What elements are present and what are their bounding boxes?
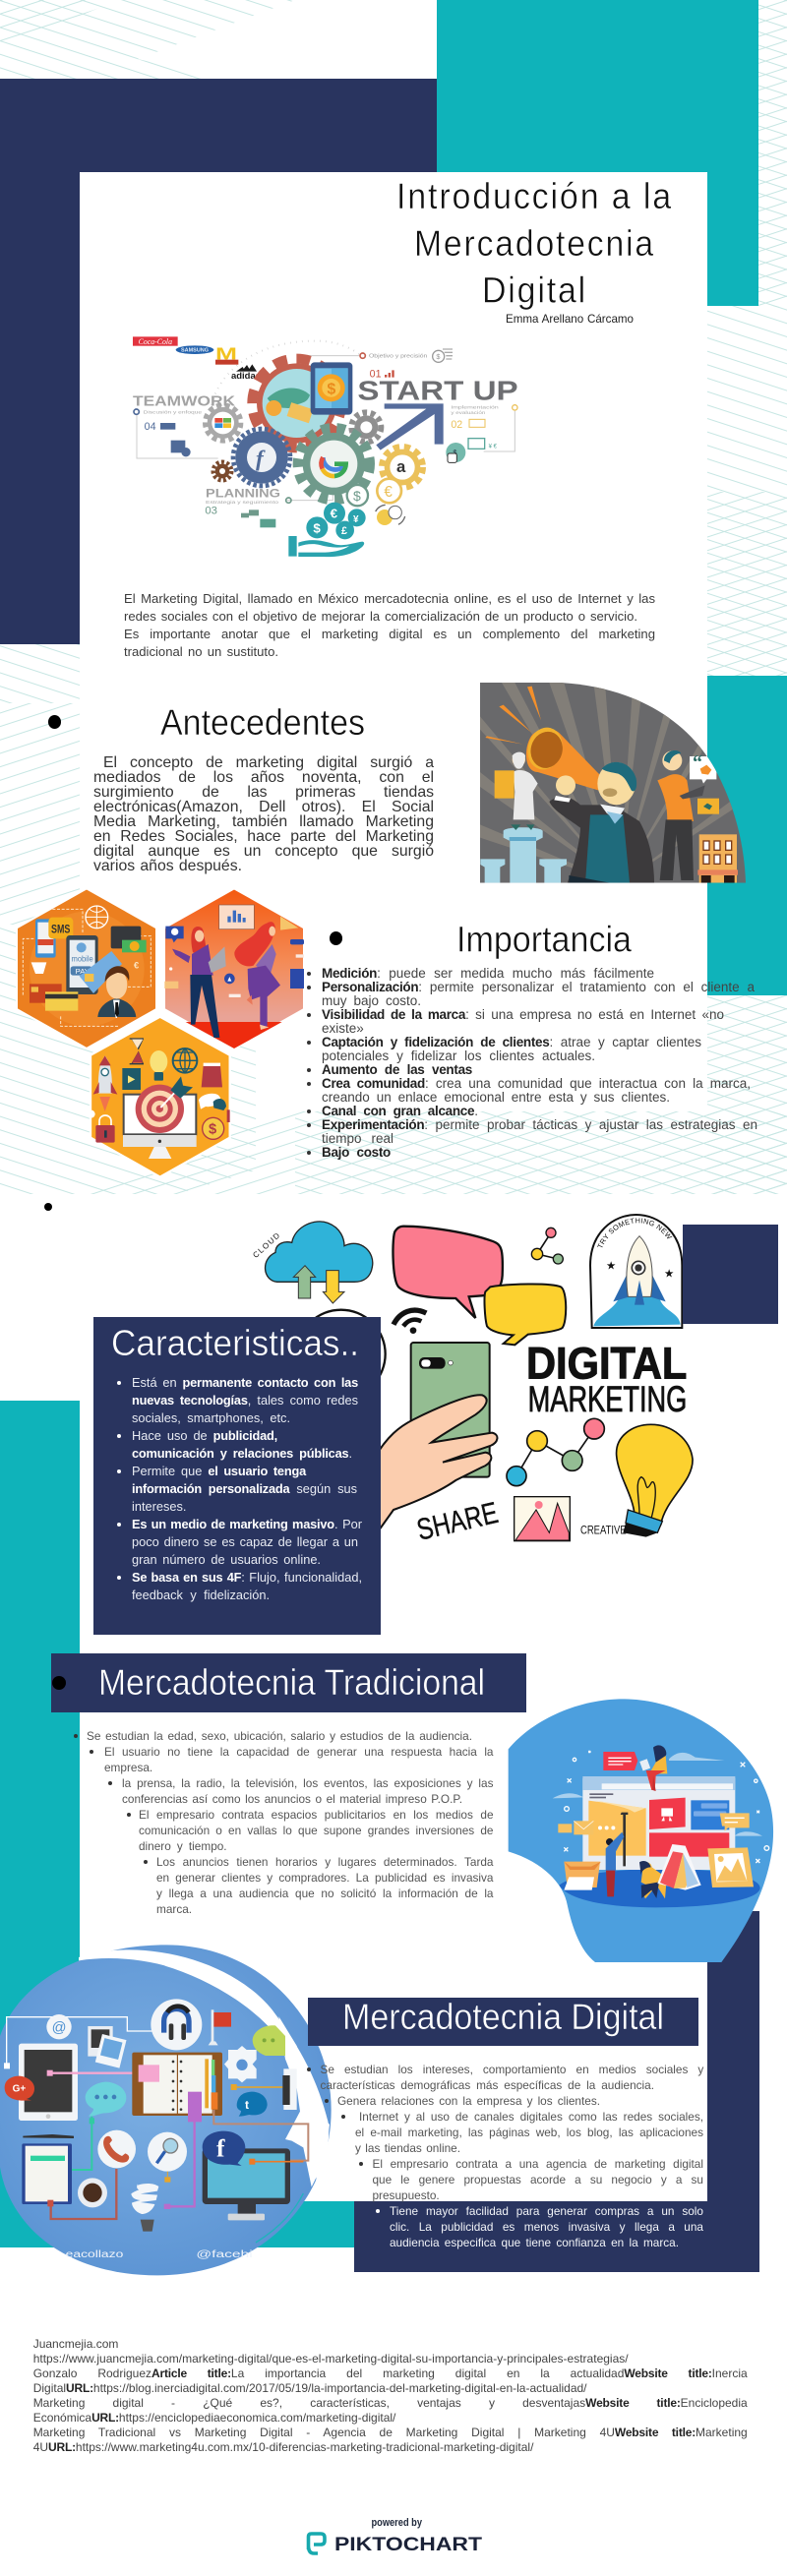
list: digital: audiencia especifica que tiene confianza en la marca. [390,2236,679,2249]
illustration: megaphone: “ [693,752,702,774]
list: importancia: Aumento de las ventas [322,1062,472,1077]
list: digital: Internet y al uso de canales digitales como las redes sociales, [359,2110,703,2124]
illustration: start up gears: £ [341,525,347,537]
list: caracteristicas: Permite que el usuario tenga [132,1464,306,1478]
navy block: right of rocket [683,1225,778,1324]
intro paragraph: tradicional no un sustituto. [124,644,278,659]
list: tradicional: la prensa, la radio, la televisión, los eventos, las exposiciones y las [122,1776,494,1790]
list: importancia: tiempo real [322,1131,394,1146]
illustration: start up gears: € [384,484,393,501]
teal block: top right [437,0,758,306]
intro paragraph [124,591,655,659]
illustration: social media circle: eacollazo [66,2249,124,2260]
illustration: start up gears: Coca-Cola [139,337,172,346]
list: caracteristicas [117,1375,362,1602]
paragraph: antecedentes [93,754,435,874]
illustration: social media circle: t [245,2098,249,2112]
illustration: digital marketing doodles [251,1214,694,1547]
list: caracteristicas: Es un medio de marketing masivo. Por [132,1517,362,1531]
list: importancia: existe» [322,1021,364,1036]
illustration: hexagon mobile payments: € [134,960,140,970]
title: Mercadotecnia [414,223,655,264]
list: importancia: Bajo costo [322,1145,391,1160]
list: importancia: Captación y fidelización de clientes: atrae y captar clientes [322,1035,701,1049]
references: EconómicaURL:https://enciclopediaeconomica.com/marketing-digital/ [33,2410,395,2424]
illustration: start up gears: ¥ [353,514,359,525]
list: caracteristicas: intereses. [132,1499,186,1514]
illustration: start up gears [133,336,518,557]
list: importancia: Personalización: permite personalizar el tratamiento con el cliente a [322,980,755,994]
navy block: right lower strip [707,1911,759,2272]
illustration: social media circle: @facehi [196,2249,253,2260]
illustration: start up gears: 04 [145,421,156,433]
list: importancia: Canal con gran alcance. [322,1104,478,1118]
footer: powered by piktochart [307,2517,482,2555]
list: tradicional: comunicación o en vallas lo que supone grandes inversiones de [139,1824,494,1837]
illustration: start up gears: f [256,447,266,472]
illustration: start up gears: Discusión y enfoque [144,409,203,414]
illustration: hexagon mobile payments [16,889,155,1048]
illustration: start up gears: Objetivo y precisión [369,354,428,360]
illustration: start up gears: $ [327,381,335,397]
teal block: right middle [707,676,787,995]
list: caracteristicas: Se basa en sus 4F: Flujo, funcionalidad, [132,1570,362,1585]
references [33,2337,748,2453]
heading: tradicional: Mercadotecnia Tradicional [98,1662,484,1703]
list: digital: el e-mail marketing, las páginas web, los blog, las aplicaciones [355,2126,703,2139]
list: tradicional: marca. [156,1902,192,1916]
list: importancia: Experimentación: permite probar tácticas y ajustar las estrategias en [322,1117,757,1132]
illustration: digital marketing doodles: CREATIVE [580,1523,627,1536]
title: Digital [482,270,587,311]
bullet: importancia [329,931,342,944]
paragraph: antecedentes: mediados de los años noventa, con el [93,769,434,786]
navy block: bottom panel [354,2201,759,2272]
illustration: hexagon mobile payments: SMS [51,922,70,935]
illustration: start up gears: 02 [451,419,462,431]
list: digital: Tiene mayor facilidad para generar compras a un solo [390,2204,703,2218]
panel: caracteristicas [93,1317,381,1635]
list: caracteristicas: sociales, smartphones, etc. [132,1410,290,1425]
heading bar: mercadotecnia tradicional [51,1653,526,1712]
list: tradicional: Se estudian la edad, sexo, ubicación, salario y estudios de la audiencia. [87,1729,472,1743]
list: digital: clic. La publicidad es menos invasiva y llega a una [390,2220,703,2234]
illustration: start up gears: $ [436,352,440,361]
title: Introducción a la [396,176,673,216]
list: caracteristicas: Está en permanente contacto con las [132,1375,358,1390]
illustration: start up gears: a [396,457,406,476]
list: digital: El empresario contrata a una agencia de marketing digital [372,2157,703,2171]
list: tradicional: conferencias así como los anuncios o el material impreso P.O.P. [122,1792,462,1806]
illustration: start up gears: y evaluación [451,410,486,415]
heading: caracteristicas: Caracteristicas.. [111,1323,359,1363]
illustration: start up gears: Implementación [451,405,499,410]
list: digital: que le genere propuestas acorde a su negocio y a su [372,2173,703,2187]
list: tradicional: en generar clientes y compradores. La publicidad es invasiva [156,1871,494,1885]
illustration: social media circle: G+ [13,2084,26,2095]
illustration: digital marketing doodles: DIGITAL [526,1339,687,1389]
list: caracteristicas: nuevas tecnologías, tales como redes [132,1393,358,1408]
paragraph: antecedentes: en Redes Sociales, hace parte del Marketing [93,828,434,845]
illustration: social media circle: f [216,2135,225,2163]
references: Juancmejia.com [33,2337,118,2351]
references: DigitalURL:https://blog.inerciadigital.com/2017/05/19/la-importancia-del-marketing-digital-en-la-actualidad/ [33,2380,587,2394]
intro paragraph: El Marketing Digital, llamado en México mercadotecnia online, es el uso de Internet y las [124,591,655,606]
list: importancia: Crea comunidad: crea una comunidad que interactua con la marca, [322,1076,751,1091]
teal block: left lower [0,1401,80,2247]
list: digital: Genera relaciones con la empresa y los clientes. [337,2094,600,2108]
illustration: start up gears: 01 [370,369,382,381]
illustration: start up gears: PLANNING [206,487,280,501]
bullet: empty list item [43,1203,51,1211]
list: importancia: Visibilidad de la marca: si una empresa no está en Internet «no [322,1007,724,1022]
illustration: digital marketing doodles: CLOUD [251,1231,281,1260]
title [396,176,673,311]
heading bar: mercadotecnia digital [308,1998,698,2046]
list: tradicional: Los anuncios tienen horarios y lugares determinados. Tarda [156,1855,494,1869]
list: tradicional [74,1729,494,1916]
list: tradicional: dinero y tiempo. [139,1839,227,1853]
list: importancia [307,966,757,1160]
illustration: start up gears: M [215,344,237,364]
references: Gonzalo RodriguezArticle title:La importancia del marketing digital en la actualidadWebsite title:Inercia [33,2366,748,2380]
navy block: top left [0,79,437,644]
illustration: hexagon marketing target [89,1018,231,1176]
list: digital [307,2063,704,2249]
references: Marketing digital - ¿Qué es?, características, ventajas y desventajasWebsite title:Enciclopedia [33,2396,748,2410]
illustration: hexagon mobile payments: PAY [76,967,90,976]
teal block: bottom band [0,2201,354,2247]
intro paragraph: redes sociales con el objetivo de mejorar la comercialización de un producto o servicio. [124,609,637,624]
list: caracteristicas: Hace uso de publicidad, [132,1428,277,1443]
illustration: hexagon business women [164,889,304,1048]
illustration: megaphone [480,683,746,883]
footer: powered by piktochart: PIKTOCHART [334,2535,482,2555]
heading: antecedentes: Antecedentes [160,702,365,743]
illustration: start up gears: $ [353,488,361,504]
list: importancia: muy bajo costo. [322,993,421,1008]
references: https://www.juancmejia.com/marketing-digital/que-es-el-marketing-digital-su-importancia-y-principales-estrategias/ [33,2351,629,2365]
list: caracteristicas: información personalizada según sus [132,1481,357,1496]
bullet: antecedentes [48,715,61,728]
illustration: digital marketing doodles: ★ [606,1261,616,1273]
list: tradicional: El usuario no tiene la capacidad de generar una respuesta hacia la [104,1745,494,1759]
paragraph: antecedentes: electrónicas(Amazon, Dell otros). El Social [93,799,434,815]
illustration: start up gears: ¥ € [489,445,498,450]
heading: importancia: Importancia [456,919,632,960]
list: caracteristicas: gran número de usuarios online. [132,1552,321,1567]
paragraph: antecedentes: varios años después. [93,858,242,874]
illustration: digital marketing doodles: ★ [664,1268,674,1280]
illustration: social media circle: @ [52,2020,67,2036]
list: digital: presupuesto. [372,2188,440,2202]
author name: Emma Arellano Cárcamo [506,313,634,326]
list: caracteristicas: poco dinero se es capaz de llegar a un [132,1534,358,1549]
intro paragraph: Es importante anotar que el marketing digital es un complemento del marketing [124,627,655,641]
list: caracteristicas: comunicación y relaciones públicas. [132,1446,352,1461]
paragraph: antecedentes: El concepto de marketing digital surgió a [103,754,434,771]
list: importancia: Medición: puede ser medida mucho más fácilmente [322,966,654,981]
list: tradicional: y llega a una audiencia que no solicitó la información de la [156,1887,494,1900]
references: Marketing Tradicional vs Marketing Digital - Agencia de Marketing Digital | Marketing 4UWebsite title:Marketing [33,2426,748,2439]
footer: powered by piktochart: powered by [372,2517,423,2529]
illustration: start up gears: adidas [231,371,261,381]
list: caracteristicas: feedback y fidelización. [132,1588,270,1602]
illustration: start up gears: € [331,507,338,521]
list: digital: Se estudian los intereses, comportamiento en medios sociales y [321,2063,703,2076]
heading: digital: Mercadotecnia Digital [342,1997,664,2037]
list: digital: y las tiendas online. [355,2141,460,2155]
paragraph: antecedentes: surgimiento de las primeras tiendas [93,784,434,801]
illustration: start up gears: SAMSUNG [181,348,209,354]
illustration: start up gears: 03 [205,506,217,517]
illustration: social media circle [0,1945,332,2276]
illustration: start up gears: $ [313,520,321,535]
bullet: tradicional [52,1676,66,1690]
references: 4UURL:https://www.marketing4u.com.mx/10-diferencias-marketing-tradicional-marketing-digital/ [33,2439,533,2453]
illustration: digital marketing doodles: MARKETING [528,1378,687,1419]
list: importancia: creando un enlace emocional entre esta y sus clientes. [322,1090,670,1105]
list: importancia: potenciales y fidelizar los clientes actuales. [322,1048,595,1063]
illustration: hexagon mobile payments: mobile [72,954,93,964]
illustration: digital marketing doodles: TRY SOMETHING NEW [597,1218,673,1247]
list: tradicional: El empresario contrata espacios publicitarios en los medios de [139,1808,494,1822]
panel: white lower sheet [80,1712,707,2201]
illustration: start up gears: Estrategia y seguimiento [206,500,279,505]
illustration: web design team on blue blob [508,1699,773,1962]
illustration: hexagon marketing target: $ [209,1122,216,1138]
list: tradicional: empresa. [104,1761,152,1774]
paragraph: antecedentes: digital aunque es un concepto que surgió [93,843,434,860]
illustration: digital marketing doodles: SHARE [414,1496,501,1547]
panel: main white sheet [80,172,707,1045]
list: digital: características demográficas más específicas de la audiencia. [321,2078,654,2092]
illustration: start up gears: TEAMWORK [133,393,235,409]
illustration: start up gears: $ [453,448,456,456]
illustration: start up gears: START UP [357,376,518,406]
paragraph: antecedentes: Media Marketing, también llamado Marketing [93,813,434,830]
